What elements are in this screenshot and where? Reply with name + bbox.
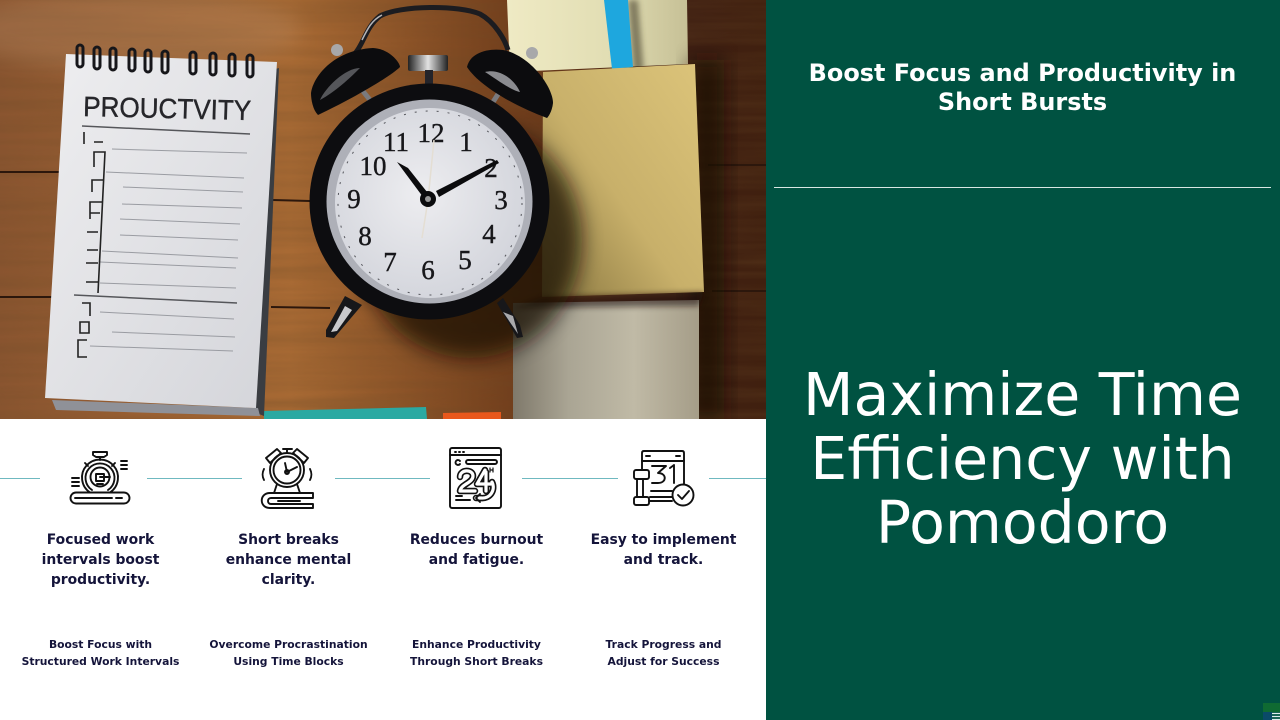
- icon: alarm clock on books: [260, 448, 314, 509]
- caption: enhance productivity: Enhance Productivity: [412, 638, 541, 651]
- shadow of clock: [358, 122, 582, 358]
- text: short breaks: clarity.: [262, 572, 315, 588]
- photo: desk with notepad, alarm clock and sticky notes: [0, 0, 766, 419]
- text: focused work: intervals boost: [42, 552, 159, 568]
- caption: track progress: Track Progress and: [606, 638, 721, 651]
- subtitle: Boost Focus and Productivity in: [809, 59, 1236, 87]
- caption: boost focus: Boost Focus with: [49, 638, 152, 651]
- handwritten title: PROUCTVITY: [83, 91, 252, 126]
- clock numerals: 7: [383, 247, 397, 277]
- icon: 24 hours browser window: [449, 447, 502, 509]
- corner artifact: [1263, 703, 1280, 720]
- sticky notes: [264, 0, 724, 419]
- subtitle: Short Bursts: [938, 88, 1107, 116]
- text: easy to implement: Easy to implement: [591, 532, 736, 548]
- clock hands: [397, 140, 499, 238]
- icon: calendar with dumbbell and check: [633, 450, 694, 506]
- text: reduces burnout: Reduces burnout: [410, 532, 543, 548]
- clock numerals: 2: [484, 153, 498, 183]
- main title: Pomodoro: [876, 489, 1169, 557]
- caption: track progress: [606, 638, 721, 668]
- main title: [803, 361, 1242, 557]
- caption: boost focus: [22, 638, 179, 668]
- checklist lines: [74, 126, 250, 351]
- text: short breaks: [226, 532, 351, 588]
- spiral binding: [77, 45, 253, 77]
- clock numerals: 3: [494, 185, 508, 215]
- text: easy to implement: [591, 532, 736, 568]
- text: short breaks: enhance mental: [226, 552, 351, 568]
- caption: enhance productivity: [410, 638, 543, 668]
- caption: enhance productivity: Through Short Breaks: [410, 655, 543, 668]
- clock numerals: 10: [360, 151, 386, 181]
- clock numerals: 4: [482, 219, 496, 249]
- text: easy to implement: and track.: [624, 552, 703, 568]
- text: focused work: productivity.: [51, 572, 150, 588]
- caption: boost focus: Structured Work Intervals: [22, 655, 179, 668]
- text: short breaks: Short breaks: [238, 532, 339, 548]
- clock numerals: 11: [383, 127, 409, 157]
- clock numerals: [347, 118, 508, 285]
- panel: green title panel: [766, 0, 1280, 720]
- alarm clock: [310, 7, 553, 338]
- bells: [311, 48, 400, 115]
- icon: stopwatch on book: [70, 451, 130, 504]
- clock numerals: 8: [358, 221, 372, 251]
- divider: [774, 187, 1271, 188]
- text: focused work: [42, 532, 160, 588]
- caption: overcome procrastination: Overcome Procrastination: [209, 638, 368, 651]
- handle: [345, 7, 508, 62]
- text: focused work: Focused work: [47, 532, 154, 548]
- connector lines: [0, 478, 766, 479]
- caption: overcome procrastination: [209, 638, 368, 668]
- body: [310, 84, 550, 320]
- main title: Maximize Time: [803, 361, 1242, 429]
- clock numerals: 6: [421, 255, 435, 285]
- clock numerals: 9: [347, 184, 361, 214]
- text: reduces burnout: and fatigue.: [429, 552, 524, 568]
- notepad: [45, 45, 279, 416]
- clock numerals: 12: [418, 118, 444, 148]
- subtitle: [809, 59, 1236, 116]
- clock numerals: 1: [459, 127, 473, 157]
- feet: [326, 296, 362, 338]
- main title: Efficiency with: [810, 425, 1235, 493]
- wood background: [0, 0, 766, 419]
- caption: overcome procrastination: Using Time Blocks: [233, 655, 344, 668]
- text: reduces burnout: [410, 532, 543, 568]
- caption: track progress: Adjust for Success: [608, 655, 719, 668]
- top knob: [408, 55, 448, 71]
- clock numerals: 5: [458, 245, 472, 275]
